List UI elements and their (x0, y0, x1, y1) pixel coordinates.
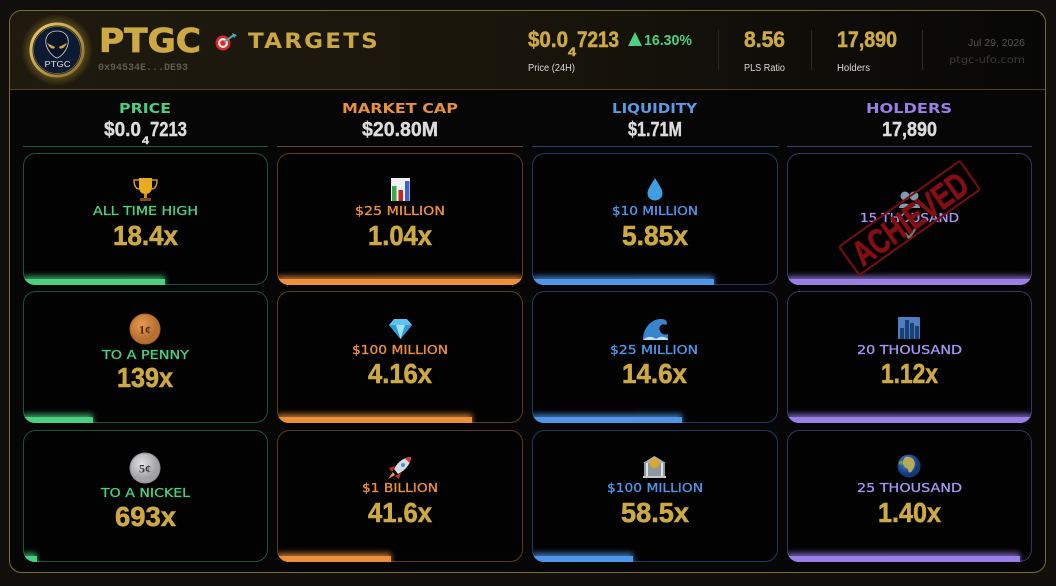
card: holders 25 thousand: 25 THOUSAND (857, 481, 962, 495)
column heading: market cap (277, 102, 523, 146)
card: liquidity 10 million: 5.85x (622, 220, 688, 251)
card: holders 25 thousand (787, 430, 1032, 567)
stat: PLS ratio (744, 27, 785, 74)
card: market cap 1 billion: 41.6x (368, 497, 432, 528)
card: to a nickel: 693x (115, 501, 176, 532)
icon: nickel coin: 5¢ (139, 462, 151, 476)
header bar (10, 11, 1045, 90)
icon: bar chart (391, 178, 410, 201)
stat: price: Price (24H) (528, 63, 575, 74)
column heading: holders: HOLDERS (866, 102, 952, 117)
column heading: holders: 17,890 (882, 119, 937, 141)
column heading: liquidity: $1.71M (628, 119, 682, 141)
contract address: 0x94534E...DE93 (98, 62, 188, 74)
card: holders 25 thousand: 1.40x (878, 497, 941, 528)
stamp: achieved: ACHIEVED (845, 165, 976, 274)
column heading: market cap: $20.80M (362, 119, 438, 141)
logo: alien coin: PTGC (44, 60, 71, 69)
icon: wave (643, 319, 668, 340)
icon: city skyline (898, 317, 920, 339)
card: holders 15 thousand (achieved): 15 THOUSAND (860, 211, 959, 225)
stat: holders (837, 27, 897, 74)
column heading: liquidity (532, 102, 778, 146)
card: market cap 1 billion: $1 BILLION (362, 481, 438, 495)
icon: check mark (905, 228, 916, 238)
card: market cap 100 million (277, 292, 522, 428)
icon: target (216, 33, 237, 50)
card: liquidity 100 million: $100 MILLION (607, 481, 703, 495)
column heading: market cap: MARKET CAP (342, 102, 458, 117)
card: holders 15 thousand (achieved) (787, 154, 1032, 290)
stat: holders: Holders (837, 63, 870, 74)
icon: globe (898, 454, 920, 478)
stat: PLS ratio: 8.56 (744, 27, 785, 52)
icon: copper coin: 1¢ (139, 322, 151, 336)
card: liquidity 100 million (532, 430, 778, 567)
card: liquidity 100 million: 58.5x (621, 497, 689, 528)
column heading: liquidity: LIQUIDITY (612, 102, 698, 117)
card: holders 20 thousand (787, 292, 1032, 428)
card: all time high: ALL TIME HIGH (93, 204, 198, 218)
column heading: price: $0.0 (104, 119, 141, 141)
card: market cap 25 million (277, 154, 523, 290)
date and site: Jul 29, 2026 (968, 38, 1025, 49)
column heading: price: 7213 (150, 119, 187, 141)
logo: alien coin (21, 14, 93, 86)
card: liquidity 25 million (532, 292, 778, 428)
stamp: achieved (839, 160, 982, 278)
date and site: ptgc-ufo.com (949, 55, 1025, 66)
card: to a penny (23, 292, 268, 428)
icon: nickel coin (130, 453, 160, 483)
stat: holders: 17,890 (837, 27, 897, 52)
card: to a nickel (23, 430, 268, 567)
stat: price: 16.30% (644, 32, 692, 49)
stat: price: 7213 (577, 27, 619, 52)
icon: diamond (389, 319, 412, 339)
icon: bank (643, 456, 666, 478)
date and site (949, 38, 1025, 66)
column heading: price: PRICE (119, 102, 171, 117)
stat: price: 4 (568, 45, 576, 59)
icon: trophy (134, 178, 157, 201)
card: to a penny: TO A PENNY (101, 348, 190, 362)
card: liquidity 10 million: $10 MILLION (612, 204, 698, 218)
card: market cap 25 million: $25 MILLION (355, 204, 445, 218)
subtitle: TARGETS: TARGETS (248, 29, 380, 53)
card: holders 20 thousand: 1.12x (881, 358, 938, 389)
card: to a penny: 139x (117, 362, 173, 393)
card: market cap 25 million: 1.04x (368, 220, 432, 251)
card: liquidity 25 million: $25 MILLION (610, 343, 698, 357)
icon: water drop (648, 178, 662, 200)
card: liquidity 10 million (532, 154, 778, 290)
card: holders 20 thousand: 20 THOUSAND (857, 343, 962, 357)
icon: rocket (388, 457, 411, 479)
stat: price: $0.0 (528, 27, 568, 52)
card: market cap 100 million: $100 MILLION (352, 343, 448, 357)
card: market cap 100 million: 4.16x (368, 358, 432, 389)
stat: price (528, 27, 692, 74)
card: all time high: 18.4x (113, 220, 178, 251)
card: market cap 1 billion (277, 430, 522, 567)
stat: PLS ratio: PLS Ratio (744, 63, 785, 74)
icon: busts (899, 192, 920, 208)
title: PTGC: PTGC (99, 21, 201, 60)
icon: copper coin (130, 314, 160, 344)
card: all time high (23, 154, 268, 290)
card: to a nickel: TO A NICKEL (100, 486, 190, 500)
card: liquidity 25 million: 14.6x (622, 358, 687, 389)
column heading: price (23, 102, 268, 147)
column heading: holders (787, 102, 1032, 146)
column heading: price: 4 (142, 135, 150, 147)
